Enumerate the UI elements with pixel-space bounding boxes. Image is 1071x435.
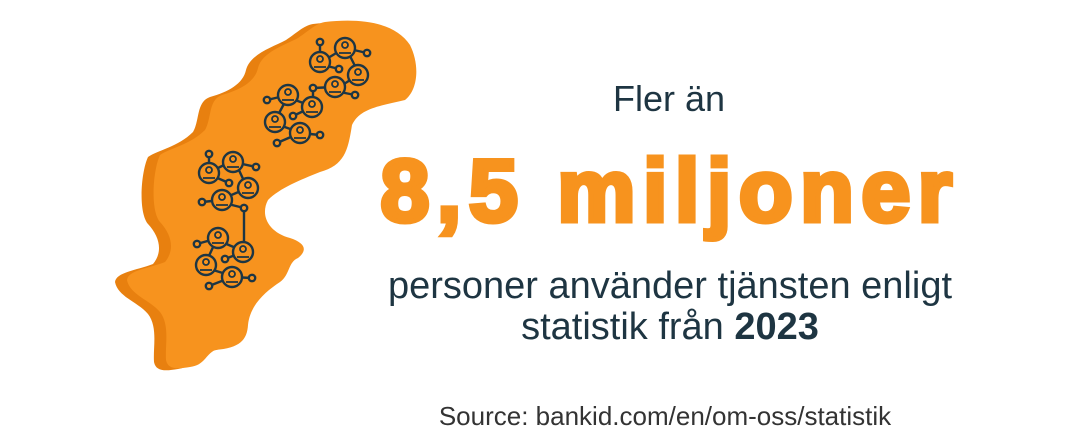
subtitle text bbox=[388, 265, 952, 348]
subtitle text: personer använder tjänsten enligt bbox=[388, 265, 952, 307]
network icons bbox=[194, 38, 370, 289]
map body bbox=[127, 21, 416, 368]
map shadow bbox=[115, 23, 404, 370]
subtitle text: statistik från 2023 bbox=[521, 306, 819, 348]
big number: 8,5 miljoner: 8,5 miljoner bbox=[380, 141, 960, 240]
source line: Source: bankid.com/en/om-oss/statistik bbox=[439, 401, 891, 431]
heading: Fler än: Fler än bbox=[613, 78, 725, 119]
